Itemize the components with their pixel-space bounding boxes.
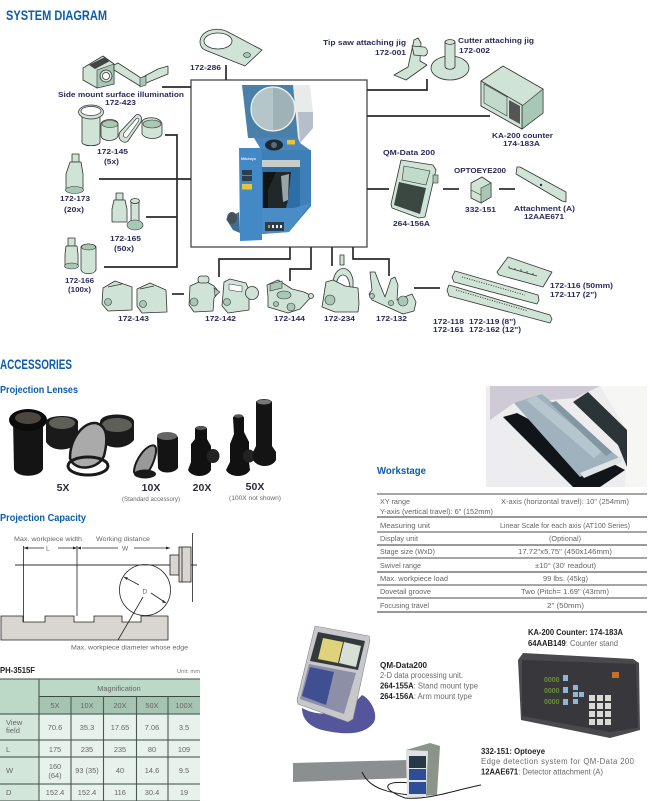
photo: KA-200 counter: 0000: [544, 688, 560, 695]
text: KA-200 counter description: 64AAB149: Counter stand: [528, 639, 618, 648]
table: workstage specifications: Measuring unit: [380, 521, 431, 530]
table: magnification: 116: [114, 788, 126, 797]
item: QM-Data 200: [383, 148, 438, 228]
item: cutter attaching jig: Cutter attaching jig: [458, 36, 534, 45]
table: magnification: 235: [114, 745, 126, 754]
table: workstage specifications: [377, 494, 647, 612]
photo: QM-Data200 unit: [297, 626, 375, 733]
table: workstage specifications: 17.72"x5.75" (450x146mm): [518, 547, 612, 556]
table: magnification: 80: [148, 745, 156, 754]
item: 172-165 50x lens: [110, 193, 143, 253]
item: 172-173 20x lens: [60, 154, 90, 214]
item: tip saw attaching jig: 172-001: [375, 48, 407, 57]
table: workstage specifications: Y-axis (vertical travel): 6" (152mm): [380, 507, 493, 516]
item: 172-143: [102, 281, 167, 323]
photo: KA-200 counter: [518, 653, 640, 738]
table: magnification: 7.06: [145, 723, 159, 732]
item: side mount surface illumination: 172-423: [105, 98, 136, 107]
photo: KA-200 counter: 0000: [544, 699, 560, 706]
table: magnification: 152.4: [46, 788, 64, 797]
table: workstage specifications: XY range: [380, 497, 410, 506]
table: magnification: 175: [49, 745, 61, 754]
table: magnification: W: [6, 766, 14, 775]
text: KA-200 counter description: KA-200 Counter: 174-183A: [528, 628, 623, 637]
item: OPTOEYE200: OPTOEYE200: [454, 166, 506, 175]
lens labels: 10X: [142, 482, 160, 494]
table: workstage specifications: Focusing travel: [380, 601, 429, 610]
text: QM-Data200 description: 264-155A: Stand mount type: [380, 682, 478, 690]
heading: system diagram: SYSTEM DIAGRAM: [6, 7, 107, 23]
item: OPTOEYE200: 332-151: [465, 205, 497, 214]
unit label: Unit: mm: [177, 669, 200, 675]
table: magnification: 93 (35): [75, 766, 99, 775]
item: QM-Data 200: QM-Data 200: [383, 148, 435, 157]
text: QM-Data200 description: 2-D data processing unit.: [380, 671, 463, 680]
table: workstage specifications: 2" (50mm): [547, 601, 584, 610]
diagram: projection capacity: L: [46, 546, 50, 552]
item: side mount surface illumination: Side mount surface illumination: [58, 90, 184, 99]
table: magnification: 20X: [113, 701, 127, 710]
item: cutter attaching jig: 172-002: [459, 46, 490, 55]
item: 172-144: 172-144: [274, 314, 306, 323]
diagram: projection capacity: Max. workpiece diameter whose edge: [71, 644, 188, 652]
item: 172-142: [189, 276, 258, 323]
item: scales 172-116 172-117: 172-117 (2"): [550, 290, 598, 299]
table: magnification: 100X: [175, 701, 193, 710]
table: magnification: Magnification: [97, 684, 141, 693]
item: 172-132: [369, 272, 416, 323]
table: magnification: 40: [116, 766, 124, 775]
text: QM-Data200 description: [380, 661, 478, 701]
table: magnification: 19: [180, 788, 188, 797]
table title: PH-3515F: PH-3515F: [0, 665, 35, 675]
item: 172-286 plate: [190, 29, 262, 72]
item: 172-144: [267, 280, 314, 323]
item: attachment A: Attachment (A): [514, 204, 576, 213]
item: 172-166 100x lens: 172-166: [65, 276, 94, 285]
item: KA-200 counter: [481, 66, 553, 148]
table: magnification: L: [6, 745, 10, 754]
table: magnification: 50X: [145, 701, 159, 710]
photo: workstage: [486, 386, 647, 487]
table: magnification: (64): [48, 771, 62, 780]
photo: profile projector: Mitutoyo: [241, 157, 257, 161]
heading: projection lenses: Projection Lenses: [0, 384, 78, 396]
item: side mount surface illumination: [58, 56, 184, 107]
lens labels: [57, 481, 264, 494]
table: magnification: 160: [49, 762, 61, 771]
table: magnification: 14.6: [145, 766, 159, 775]
item: scales 172-118 172-119 172-161 172-162: [433, 271, 552, 334]
table: magnification: 30.4: [145, 788, 159, 797]
table: magnification: 3.5: [179, 723, 189, 732]
item: cutter attaching jig: [431, 36, 534, 80]
item: attachment A: 12AAE671: [524, 212, 565, 221]
item: QM-Data 200: 264-156A: [393, 219, 431, 228]
lens labels: 20X: [193, 482, 211, 494]
item: attachment A: [514, 167, 576, 221]
item: KA-200 counter: KA-200 counter: [492, 131, 553, 140]
table: workstage specifications: ±10° (30' readout): [535, 561, 596, 570]
item: 172-145 5x lens: 172-145: [97, 147, 129, 156]
diagram: projection capacity: [1, 533, 197, 652]
item: 172-286 plate: 172-286: [190, 63, 221, 72]
item: tip saw attaching jig: Tip saw attaching jig: [323, 38, 406, 47]
photo: Optoeye unit and detector attachment: [293, 743, 481, 798]
text: Optoeye description: 332-151: Optoeye: [481, 747, 546, 756]
table: workstage specifications: Display unit: [380, 534, 419, 543]
table: workstage specifications: Two (Pitch= 1.69" (43mm): [521, 587, 609, 596]
panel: central projector box: [191, 80, 367, 247]
item: scales 172-118 172-119 172-161 172-162: 172-119 (8"): [469, 317, 517, 326]
heading: projection capacity: Projection Capacity: [0, 512, 86, 524]
text: QM-Data200 description: QM-Data200: [380, 661, 428, 670]
table: magnification: 9.5: [179, 766, 189, 775]
connector lines: [99, 65, 515, 294]
text: Optoeye description: [481, 747, 635, 776]
photo: projection lenses: [9, 399, 276, 478]
table: workstage specifications: Stage size (WxD): [380, 547, 435, 556]
item: 172-132: 172-132: [376, 314, 407, 323]
item: 172-234: 172-234: [324, 314, 356, 323]
item: 172-234: [322, 255, 359, 323]
heading: accessories: ACCESSORIES: [0, 357, 72, 372]
item: 172-142: 172-142: [205, 314, 236, 323]
diagram: projection capacity: Max. workpiece width: [14, 536, 82, 543]
table: magnification: D: [6, 788, 12, 797]
table: workstage specifications: Swivel range: [380, 561, 421, 570]
item: 172-173 20x lens: (20x): [64, 205, 85, 214]
lens note: 100X not shown: (100X not shown): [229, 495, 281, 502]
text: QM-Data200 description: 264-156A: Arm mount type: [380, 692, 472, 701]
text: Optoeye description: 12AAE671: Detector attachment (A): [481, 768, 603, 776]
table: magnification: field: [6, 726, 20, 735]
table: workstage specifications: X-axis (horizontal travel): 10" (254mm): [501, 497, 629, 506]
item: scales 172-116 172-117: [497, 257, 614, 299]
table: magnification: 235: [81, 745, 93, 754]
item: scales 172-118 172-119 172-161 172-162: 172-118: [433, 317, 464, 326]
heading: workstage: Workstage: [377, 465, 426, 477]
table: workstage specifications: Max. workpiece load: [380, 574, 448, 583]
item: 172-145 5x lens: [78, 105, 162, 166]
lens note: standard accessory: (Standard accessory): [122, 496, 180, 503]
item: 172-166 100x lens: [64, 238, 96, 294]
table: magnification: 70.6: [48, 723, 62, 732]
item: scales 172-116 172-117: 172-116 (50mm): [550, 281, 614, 290]
table: magnification: [0, 679, 200, 801]
photo: profile projector: [226, 85, 313, 241]
lens labels: 50X: [246, 481, 264, 493]
diagram: projection capacity: W: [122, 546, 129, 552]
photo: KA-200 counter: 0000: [544, 677, 560, 684]
item: OPTOEYE200: [454, 166, 506, 214]
item: 172-166 100x lens: (100x): [68, 285, 91, 294]
item: 172-165 50x lens: 172-165: [110, 234, 142, 243]
diagram: projection capacity: Working distance: [96, 536, 150, 543]
item: KA-200 counter: 174-183A: [503, 139, 541, 148]
table: magnification: 109: [178, 745, 190, 754]
item: scales 172-118 172-119 172-161 172-162: 172-161: [433, 325, 465, 334]
table: workstage specifications: Linear Scale for each axis (AT100 Series): [500, 521, 630, 530]
table: magnification: 10X: [80, 701, 94, 710]
item: 172-165 50x lens: (50x): [114, 244, 135, 253]
lens labels: 5X: [57, 482, 69, 494]
table: workstage specifications: 99 lbs. (45kg): [543, 574, 588, 583]
text: Optoeye description: Edge detection system for QM-Data 200: [481, 757, 635, 766]
item: 172-143: 172-143: [118, 314, 149, 323]
item: 172-173 20x lens: 172-173: [60, 194, 90, 203]
table: magnification: 35.3: [80, 723, 94, 732]
diagram: projection capacity: D: [142, 588, 148, 596]
item: scales 172-118 172-119 172-161 172-162: 172-162 (12"): [469, 325, 522, 334]
table: magnification: 152.4: [78, 788, 96, 797]
text: KA-200 counter description: [528, 628, 623, 648]
table: magnification: 5X: [50, 701, 60, 710]
item: 172-145 5x lens: (5x): [104, 157, 120, 166]
table: workstage specifications: (Optional): [549, 534, 581, 543]
item: tip saw attaching jig: [323, 38, 427, 80]
table: workstage specifications: Dovetail groove: [380, 587, 431, 596]
table: magnification: 17.65: [111, 723, 129, 732]
table: magnification: View: [6, 718, 23, 727]
